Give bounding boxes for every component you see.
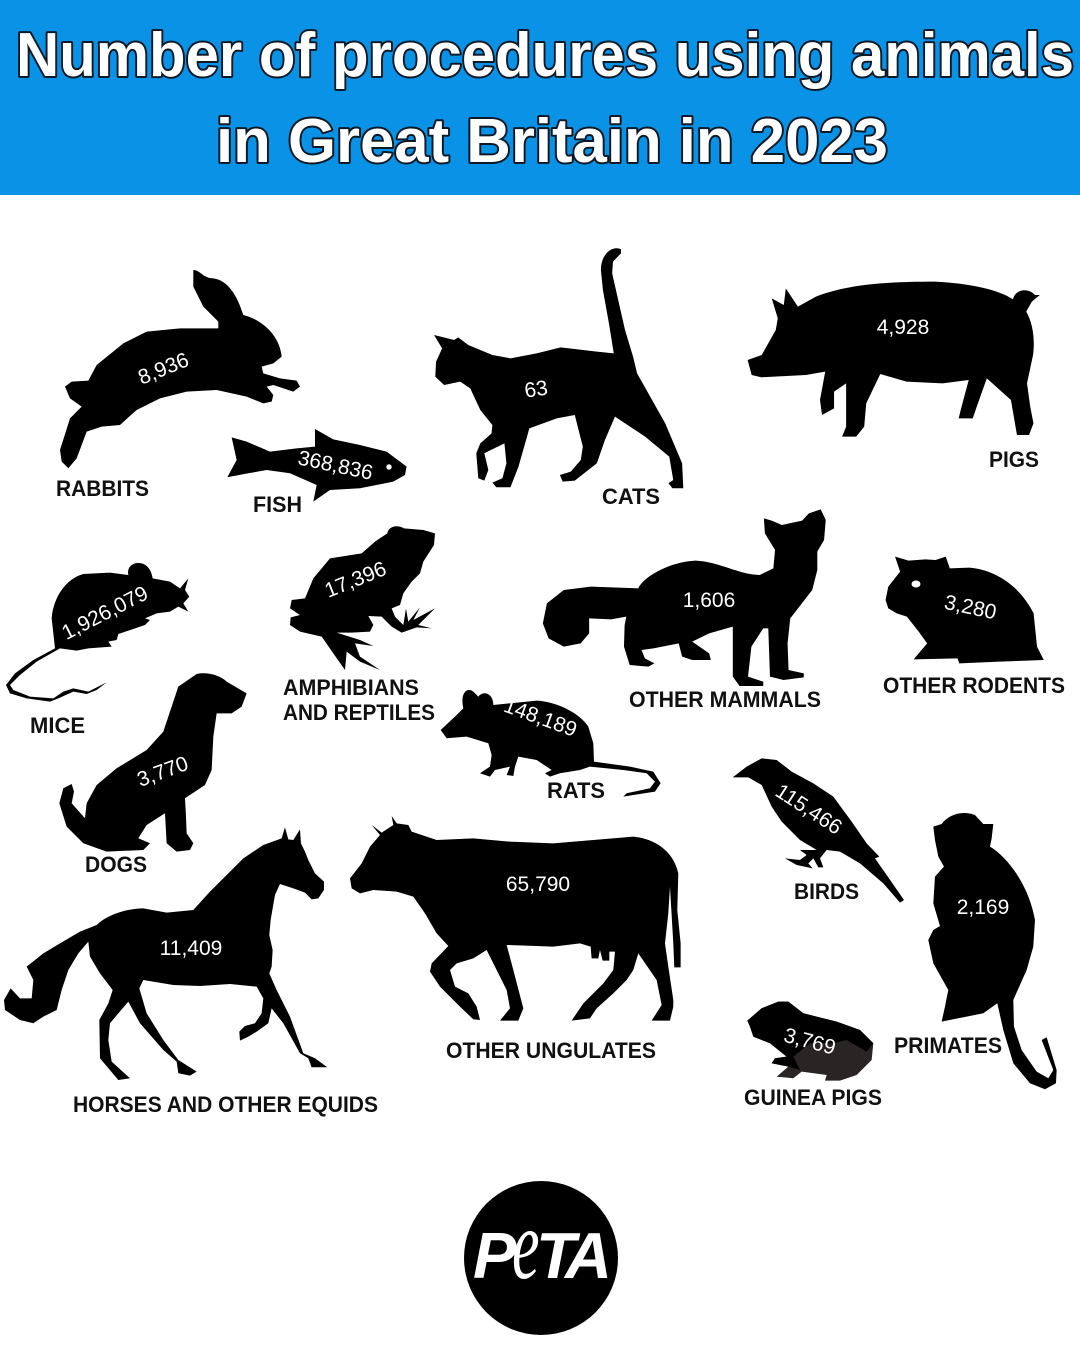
frog: AMPHIBIANS: [283, 675, 419, 700]
other mammals: OTHER MAMMALS: [629, 687, 821, 712]
guinea pig: GUINEA PIGS: [744, 1085, 882, 1110]
cow: 65,790: [506, 873, 570, 896]
mouse: MICE: [30, 713, 85, 738]
title banner: [0, 0, 1080, 195]
cow: OTHER UNGULATES: [446, 1038, 656, 1063]
mouse: [6, 563, 189, 738]
bird: [733, 758, 904, 904]
frog: AND REPTILES: [283, 700, 435, 725]
pig: PIGS: [989, 447, 1039, 472]
rat: [441, 690, 661, 803]
pig: [748, 282, 1040, 472]
cat: 63: [523, 377, 549, 403]
fish: FISH: [253, 492, 302, 517]
bird: BIRDS: [794, 879, 859, 904]
dog: DOGS: [85, 852, 147, 877]
rabbit: 8,936: [135, 348, 192, 389]
other mammals: 1,606: [683, 589, 735, 612]
PETA logo: [464, 1181, 618, 1335]
frog: 17,396: [321, 557, 390, 603]
rabbit: [56, 270, 300, 501]
horse: [4, 827, 378, 1117]
dog: 3,770: [134, 752, 191, 792]
frog: [283, 526, 435, 725]
PETA logo: T: [536, 1219, 581, 1292]
other rodents: OTHER RODENTS: [883, 673, 1065, 698]
dog: [59, 673, 247, 877]
horse: HORSES AND OTHER EQUIDS: [73, 1092, 378, 1117]
cat: CATS: [602, 484, 660, 509]
fish: 368,836: [296, 447, 375, 485]
guinea pig: 3,769: [781, 1024, 838, 1060]
title banner: Number of procedures using animals: [16, 21, 1074, 90]
guinea pig: [744, 1002, 882, 1110]
rat: RATS: [547, 778, 605, 803]
title banner: in Great Britain in 2023: [216, 107, 888, 176]
rabbit: RABBITS: [56, 476, 149, 501]
other rodents: [883, 557, 1065, 698]
primate: [894, 813, 1057, 1089]
PETA logo: A: [563, 1219, 612, 1292]
primate: PRIMATES: [894, 1033, 1002, 1058]
bird: 115,466: [771, 780, 846, 839]
other mammals: [543, 509, 826, 712]
rat: 148,189: [501, 694, 580, 742]
mouse: 1,926,079: [58, 582, 152, 645]
primate: 2,169: [957, 896, 1009, 919]
PETA logo: e: [512, 1189, 540, 1300]
cat: [434, 248, 683, 509]
fish: [227, 429, 407, 517]
horse: 11,409: [160, 937, 222, 960]
cow: [350, 816, 681, 1063]
pig: 4,928: [877, 316, 929, 339]
PETA logo: P: [473, 1219, 517, 1292]
other rodents: 3,280: [942, 591, 998, 624]
